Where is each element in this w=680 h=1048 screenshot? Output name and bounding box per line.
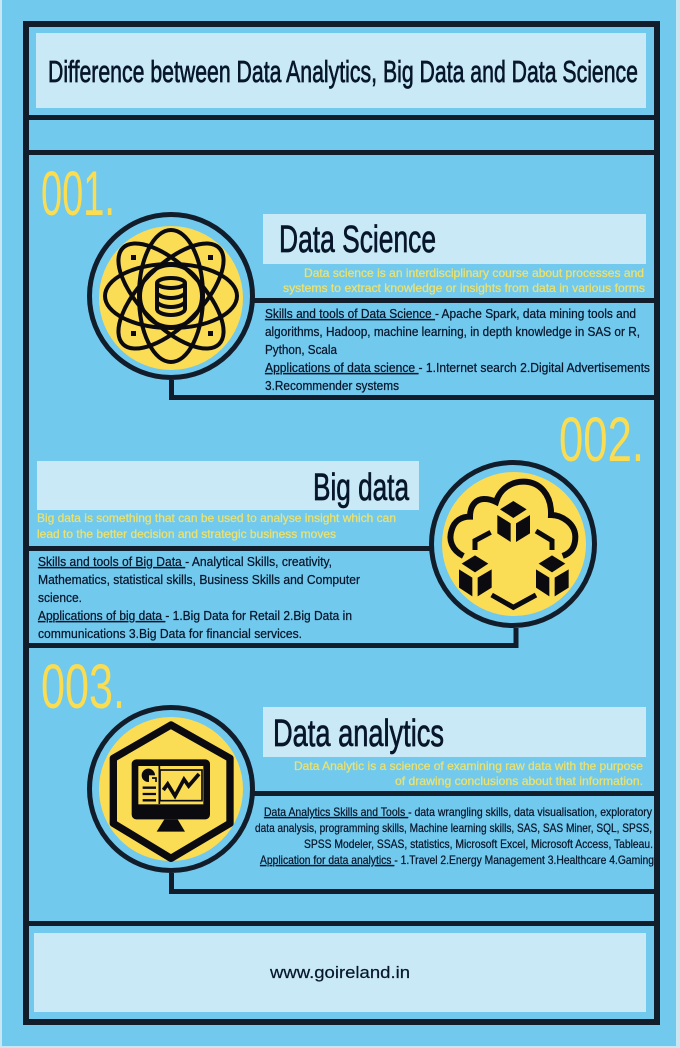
section: Big data <box>23 405 644 646</box>
skills and applications: Big data: Skills and tools of Big Data - Analytical Skills, creativity, <box>38 554 332 569</box>
description: Data Science: systems to extract knowledge or insights from data in various forms <box>283 281 645 295</box>
heading: Big data: Big data <box>313 467 410 509</box>
description: Data analytics: Data Analytic is a science of examining raw data with the purpose <box>294 759 643 773</box>
heading: Data Science: Data Science <box>279 219 436 261</box>
description: Big data <box>37 511 396 541</box>
icon: cloud with cubes <box>432 462 594 626</box>
skills and applications: Data Science: algorithms, Hadoop, machine learning, in depth knowledge in SAS or R, <box>265 324 640 339</box>
connector lines <box>172 794 655 892</box>
footer panel <box>34 933 646 1012</box>
website address: www.goireland.in <box>269 963 410 982</box>
skills and applications: Data Science: Skills and tools of Data Science - Apache Spark, data mining tools and <box>265 306 636 321</box>
heading: Data Science <box>263 214 646 264</box>
skills and applications: Data analytics <box>255 805 654 867</box>
skills and applications: Data Science: Applications of data science - 1.Internet search 2.Digital Advertisements <box>265 360 650 375</box>
skills and applications: Big data: communications 3.Big Data for financial services. <box>38 626 302 641</box>
icon: monitor in hexagon <box>90 708 252 870</box>
description: Data Science: Data science is an interdisciplinary course about processes and <box>304 266 644 280</box>
heading: Data analytics <box>263 707 646 757</box>
connector lines <box>172 300 655 398</box>
skills and applications: Big data: Mathematics, statistical skills, Business Skills and Computer <box>38 572 361 587</box>
skills and applications: Data Science: Python, Scala <box>265 342 338 357</box>
skills and applications: Big data <box>38 554 361 641</box>
title <box>36 33 646 108</box>
heading: Data analytics: Data analytics <box>273 713 444 755</box>
connector lines <box>23 548 516 646</box>
description: Data analytics: of drawing conclusions about that information. <box>395 774 643 788</box>
description: Big data: Big data is something that can be used to analyse insight which can <box>37 511 396 525</box>
number 003: 003. <box>41 652 125 722</box>
section: Data analytics <box>41 652 655 892</box>
skills and applications: Big data: Applications of big data - 1.Big Data for Retail 2.Big Data in <box>38 608 352 623</box>
skills and applications: Big data: science. <box>38 590 82 605</box>
skills and applications: Data Science <box>265 306 650 393</box>
number 002: 002. <box>559 405 644 475</box>
number 001: 001. <box>41 159 115 229</box>
icon: atom with database <box>90 214 252 378</box>
skills and applications: Data analytics: Data Analytics Skills and Tools - data wrangling skills, data visualisation, exploratory <box>264 805 652 819</box>
section: Data Science <box>41 159 655 398</box>
description: Data analytics <box>294 759 643 788</box>
heading: Big data <box>37 461 419 510</box>
description: Big data: lead to the better decision and strategic business moves <box>37 527 336 541</box>
description: Data Science <box>283 266 645 295</box>
skills and applications: Data Science: 3.Recommender systems <box>265 378 399 393</box>
